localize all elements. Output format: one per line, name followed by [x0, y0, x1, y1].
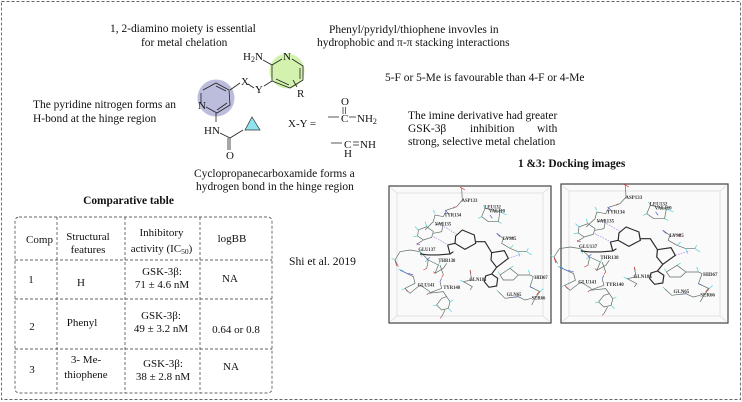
highlight: pyridine ring — [198, 80, 234, 116]
residue labels: VAL110 — [655, 206, 672, 211]
text: pyridine nitrogen note — [33, 99, 176, 125]
atom labels — [198, 51, 305, 162]
atom labels: R — [297, 88, 305, 100]
residue labels: HID67 — [703, 273, 718, 278]
X-Y definition — [288, 96, 377, 160]
heading: comparative table: Comparative table — [83, 195, 174, 207]
X-Y definition: 2 — [373, 117, 377, 126]
row 3 — [29, 354, 239, 383]
row 3: GSK-3β: — [143, 358, 183, 370]
residue labels: GLU141 — [578, 280, 597, 285]
text: pyridine nitrogen note: H-bond at the hinge region — [33, 113, 157, 125]
residue labels: ASP133 — [625, 196, 643, 201]
row 2: 2 — [29, 321, 35, 333]
residue labels: TYR140 — [443, 286, 461, 291]
cyclopropyl — [245, 117, 260, 130]
residue labels: VAL135 — [597, 219, 615, 224]
ligand — [420, 230, 508, 287]
atom labels: N — [255, 51, 263, 63]
text: diamino moiety note — [110, 23, 256, 49]
text: citation: Shi et al. 2019 — [289, 255, 356, 268]
X-Y definition: NH — [357, 113, 373, 125]
row 2: 49 ± 3.2 nM — [134, 323, 188, 335]
residue labels: GLU137 — [579, 245, 598, 250]
table header — [26, 227, 246, 256]
atom labels: X — [241, 76, 249, 88]
text: phenyl stacking note: hydrophobic and π-π stacking interactions — [317, 37, 510, 49]
row 3: NA — [223, 361, 239, 373]
row 1: H — [77, 277, 85, 289]
text: phenyl stacking note — [317, 24, 510, 49]
residue labels: GLN65 — [673, 290, 690, 295]
comparative table — [15, 217, 272, 393]
text: imine derivative note: GSK-3β — [408, 123, 446, 135]
residue labels: LYS85 — [503, 237, 517, 242]
highlight: amino pyridine ring — [270, 54, 304, 88]
residue labels: TYR134 — [444, 214, 462, 219]
table header: Structural — [66, 231, 110, 243]
table header: ) — [189, 243, 193, 255]
row 3: 3- Me- — [71, 354, 101, 366]
protein sticks — [550, 184, 713, 315]
residue labels: GLN185 — [469, 278, 487, 283]
row 2 — [29, 310, 260, 336]
text: cyclopropanecarboxamide note: hydrogen bond in the hinge region — [196, 181, 354, 193]
residue labels: ASP133 — [462, 199, 478, 204]
chemical structure — [198, 51, 377, 162]
text: cyclopropanecarboxamide note — [194, 168, 355, 193]
text: imine derivative note: with — [537, 123, 558, 135]
residue labels — [578, 196, 718, 298]
atom labels: N — [198, 100, 206, 112]
row 2: 0.64 or 0.8 — [212, 324, 260, 336]
atom labels: 2 — [251, 55, 255, 64]
residue labels: VAL110 — [489, 209, 506, 214]
table header: features — [71, 244, 105, 256]
residue labels: TYR134 — [607, 211, 625, 216]
text: imine derivative note: strong, selective metal chelation — [408, 136, 556, 148]
residue labels: SER66 — [532, 296, 546, 301]
atom labels: Y — [255, 84, 263, 96]
row 2: Phenyl — [67, 317, 97, 329]
atom labels: N — [283, 51, 291, 63]
table header: Inhibitory — [140, 227, 184, 239]
residue labels: VAL135 — [435, 222, 452, 227]
residue labels: LYS85 — [670, 234, 684, 239]
residue labels: GLU137 — [418, 248, 436, 253]
residue labels: THR138 — [438, 259, 456, 264]
residue labels: LEU132 — [484, 205, 502, 210]
table header: logBB — [218, 233, 246, 245]
text: phenyl stacking note: Phenyl/pyridyl/thiophene invovles in — [329, 24, 499, 36]
row 1: NA — [222, 273, 238, 285]
text: diamino moiety note: for metal chelation — [141, 37, 228, 49]
X-Y definition: O — [341, 96, 349, 108]
row 1: 71 ± 4.6 nM — [135, 279, 189, 291]
text: diamino moiety note: 1, 2-diamino moiety is essential — [110, 23, 256, 35]
X-Y definition: C — [344, 139, 351, 151]
row 1 — [28, 266, 238, 291]
residue labels: LEU132 — [650, 202, 668, 207]
text: imine derivative note: The imine derivative had greater — [408, 110, 557, 122]
residue labels — [418, 199, 548, 301]
table header: Comp — [26, 234, 53, 246]
X-Y definition: C — [341, 113, 348, 125]
protein sticks — [392, 187, 543, 318]
docking image 1 — [389, 186, 551, 323]
atom labels: H — [243, 51, 251, 63]
text: cyclopropanecarboxamide note: Cyclopropanecarboxamide forms a — [194, 168, 355, 180]
table header: activity (IC — [131, 243, 181, 255]
table header: 50 — [181, 247, 189, 256]
atom labels: O — [226, 150, 234, 162]
X-Y definition: H — [344, 148, 352, 160]
text: pyridine nitrogen note: The pyridine nitrogen forms an — [33, 99, 176, 111]
text: imine derivative note — [408, 110, 558, 148]
residue labels: SER66 — [700, 293, 716, 298]
heading: docking images: 1 &3: Docking images — [518, 158, 626, 170]
residue labels: HID67 — [534, 276, 548, 281]
docking image 2 — [550, 184, 728, 323]
text: fluoro methyl note: 5-F or 5-Me is favourable than 4-F or 4-Me — [385, 72, 584, 84]
residue labels: THR138 — [600, 256, 619, 261]
residue labels: GLN185 — [634, 275, 652, 280]
row 3: 3 — [29, 364, 35, 376]
ligand — [581, 227, 675, 284]
row 2: GSK-3β: — [141, 310, 181, 322]
residue labels: GLU141 — [418, 283, 435, 288]
ring bonds — [201, 59, 303, 150]
text: imine derivative note: inhibition — [470, 123, 515, 135]
row 1: 1 — [28, 274, 34, 286]
X-Y definition: X-Y = — [288, 118, 316, 130]
X-Y definition: NH — [360, 139, 376, 151]
row 3: thiophene — [64, 369, 108, 381]
row 1: GSK-3β: — [142, 266, 182, 278]
residue labels: TYR140 — [606, 283, 624, 288]
row 3: 38 ± 2.8 nM — [136, 371, 190, 383]
atom labels: HN — [204, 125, 220, 137]
residue labels: GLN65 — [507, 293, 522, 298]
